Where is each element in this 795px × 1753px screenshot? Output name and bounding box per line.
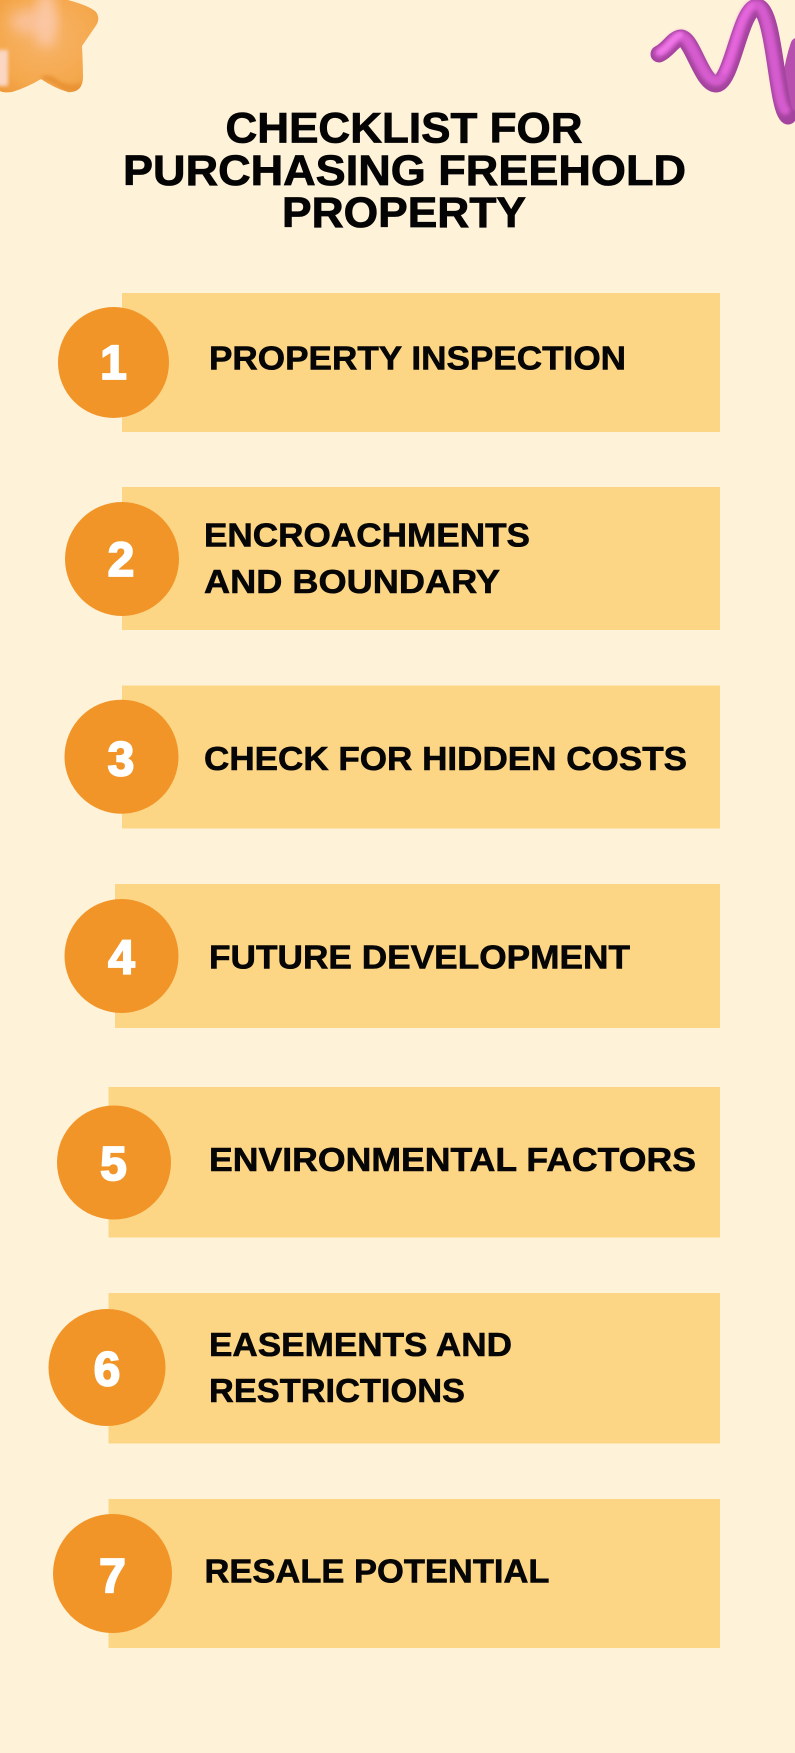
number badge 1: 1 (100, 337, 127, 390)
number badge 4 (64, 899, 178, 1013)
number badge 6: 6 (94, 1344, 120, 1396)
label: property inspection: PROPERTY INSPECTION (209, 340, 626, 376)
panel: item 1 (58, 293, 720, 432)
number badge 2: 2 (108, 534, 134, 587)
number badge 5 (57, 1106, 171, 1220)
icon: purple 3D squiggle (659, 5, 795, 116)
number badge 7: 7 (99, 1550, 126, 1604)
label: encroachments and boundary (204, 516, 530, 600)
label: environmental factors: ENVIRONMENTAL FACTORS (209, 1141, 696, 1178)
number badge 5: 5 (100, 1138, 127, 1191)
number badge 3 (64, 700, 178, 814)
panel: item 4 (64, 884, 720, 1028)
title: CHECKLIST FOR (226, 104, 582, 152)
label: resale potential: RESALE POTENTIAL (204, 1553, 550, 1590)
number badge 6 (48, 1309, 166, 1426)
number badge 3: 3 (108, 734, 134, 786)
label: check for hidden costs: CHECK FOR HIDDEN COSTS (204, 740, 687, 777)
icon: orange 3D star (0, 0, 102, 95)
title: PROPERTY (282, 189, 526, 237)
label: easements and restrictions: EASEMENTS AND (209, 1326, 512, 1363)
number badge 1 (58, 307, 169, 418)
panel: item 3 (64, 686, 720, 828)
number badge 4: 4 (108, 932, 135, 985)
label: easements and restrictions: RESTRICTIONS (209, 1372, 465, 1409)
panel: item 2 (65, 487, 720, 630)
title (123, 104, 686, 237)
label: encroachments and boundary: ENCROACHMENTS (204, 516, 530, 554)
number badge 2 (65, 502, 179, 616)
label: easements and restrictions (209, 1326, 512, 1409)
panel: item 5 (57, 1087, 720, 1238)
panel: item 7 (53, 1499, 720, 1648)
title: PURCHASING FREEHOLD (123, 147, 686, 195)
label: encroachments and boundary: AND BOUNDARY (204, 563, 500, 600)
number badge 7 (53, 1514, 172, 1633)
panel: item 6 (48, 1293, 720, 1444)
label: future development: FUTURE DEVELOPMENT (209, 939, 630, 976)
